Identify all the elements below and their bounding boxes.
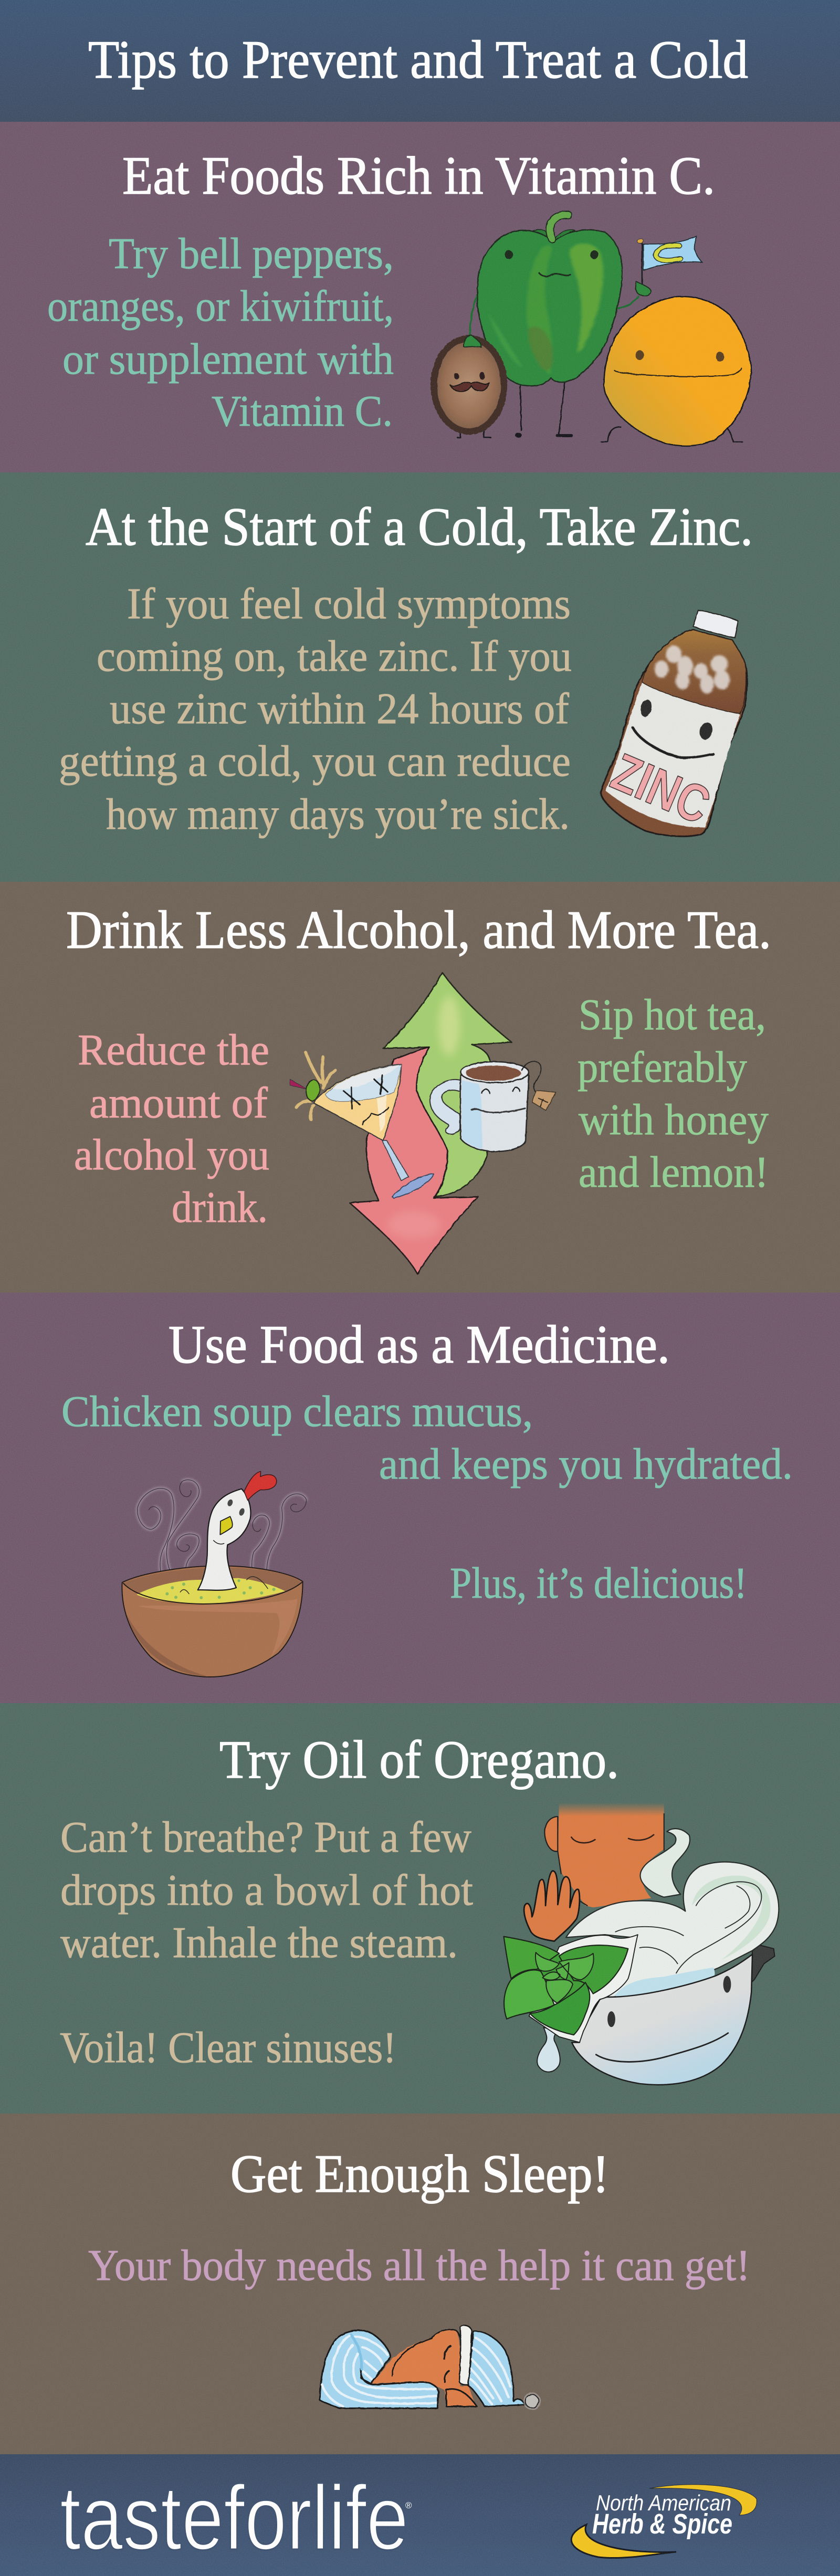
icon: soup (123, 1577, 302, 1604)
logo: North American Herb and Spice (571, 2485, 757, 2558)
panel: vitamin C (0, 122, 840, 472)
icon: pot handle (751, 1945, 775, 1982)
arrow: down, red (350, 1047, 478, 1274)
illustration: sleeping figure (320, 2326, 541, 2410)
icon: kiwi with moustache (434, 335, 503, 438)
icon: steam swirls (138, 1480, 306, 1589)
icon: blanket right (468, 2331, 525, 2406)
arrow: up, green (383, 973, 511, 1197)
icon: oregano leaves (504, 1935, 638, 2042)
icon: blanket left (320, 2330, 438, 2408)
text block: reduce alcohol: amount of (89, 1079, 268, 1127)
icon: smiling pot (572, 1955, 752, 2085)
text block: vitamin C advice: or supplement with (62, 335, 394, 384)
icon: chicken head (198, 1471, 277, 1590)
icon: pillow strip (459, 2326, 471, 2385)
text block: sip tea: with honey (579, 1095, 769, 1144)
icon: steam (566, 1829, 779, 2000)
panel: footer (0, 2454, 840, 2576)
icon: orange (601, 297, 751, 446)
illustration: chicken soup bowl (122, 1471, 306, 1677)
text block: chicken soup line two: and keeps you hydrated. (379, 1440, 793, 1488)
title: Tips to Prevent and Treat a Cold (88, 30, 748, 90)
text block: reduce alcohol: alcohol you (74, 1131, 269, 1179)
text block: reduce alcohol: Reduce the (78, 1026, 269, 1074)
text block: zinc advice: getting a cold, you can reduce (59, 737, 571, 786)
logo: taste for life: tasteforlife (60, 2466, 408, 2569)
panel: sleep (0, 2114, 840, 2454)
logo mark: registered: ® (405, 2500, 412, 2510)
icon: bell pepper (470, 215, 638, 438)
text block: oregano advice: Can’t breathe? Put a few (60, 1813, 471, 1862)
text block: oregano advice: Voila! Clear sinuses! (60, 2023, 396, 2072)
text block: sip tea: and lemon! (579, 1148, 769, 1197)
icon: face and hand (524, 1802, 664, 1941)
heading: sleep: Get Enough Sleep! (230, 2144, 609, 2204)
icon: blanket tassel (523, 2392, 541, 2410)
text block: oregano advice (60, 1813, 473, 2072)
text block: vitamin C advice: Try bell peppers, (109, 229, 394, 278)
logo: North American Herb and Spice: North American (596, 2490, 731, 2515)
text block: sip tea: Sip hot tea, (579, 990, 766, 1039)
text block: delicious: Plus, it’s delicious! (450, 1559, 747, 1608)
text block: vitamin C advice: Vitamin C. (212, 387, 393, 436)
icon: flag with letter C (635, 236, 702, 296)
text block: reduce alcohol: drink. (172, 1183, 268, 1232)
text block: vitamin C advice (47, 229, 394, 436)
text block: oregano advice: drops into a bowl of hot (60, 1866, 473, 1915)
icon: tea mug with tea bag (430, 1062, 556, 1152)
icon: hand (446, 2389, 477, 2406)
text block: zinc advice: If you feel cold symptoms (127, 579, 571, 628)
panel: oregano (0, 1703, 840, 2114)
text block: zinc advice (59, 579, 572, 839)
icon: bowl (122, 1566, 303, 1677)
text block: zinc advice: how many days you’re sick. (106, 790, 570, 839)
text block: zinc advice: coming on, take zinc. If you (97, 632, 572, 681)
text block: sleep advice: Your body needs all the help it can get! (88, 2241, 750, 2290)
heading: oregano: Try Oil of Oregano. (219, 1730, 619, 1790)
icon: martini glass (290, 1052, 434, 1198)
heading: alcohol and tea: Drink Less Alcohol, and More Tea. (66, 900, 771, 960)
panel: food as medicine (0, 1293, 840, 1703)
panel: zinc (0, 472, 840, 882)
heading: zinc: At the Start of a Cold, Take Zinc. (86, 497, 753, 557)
text block: reduce alcohol (74, 1026, 269, 1232)
icon: oil drop (537, 2028, 560, 2072)
logo: North American Herb and Spice: Herb & Spice (592, 2508, 732, 2540)
illustration: arrows, martini and mug (290, 973, 556, 1274)
heading: food as medicine: Use Food as a Medicine. (169, 1315, 670, 1375)
icon: head (371, 2329, 476, 2406)
panel: alcohol and tea (0, 882, 840, 1293)
panel: header (0, 0, 840, 122)
text block: sip tea (578, 990, 769, 1197)
text block: zinc advice: use zinc within 24 hours of (110, 684, 569, 733)
text block: sip tea: preferably (578, 1043, 747, 1092)
text block: vitamin C advice: oranges, or kiwifruit, (47, 282, 394, 331)
text block: oregano advice: water. Inhale the steam. (60, 1918, 458, 1967)
illustration: zinc bottle (601, 610, 747, 836)
illustration: pepper, kiwi and orange (434, 215, 751, 446)
label: ZINC on bottle: ZINC (603, 742, 718, 835)
text block: chicken soup line one: Chicken soup clears mucus, (61, 1387, 533, 1436)
illustration: steaming pot with oregano (504, 1802, 779, 2085)
heading: vitamin C: Eat Foods Rich in Vitamin C. (122, 146, 715, 206)
